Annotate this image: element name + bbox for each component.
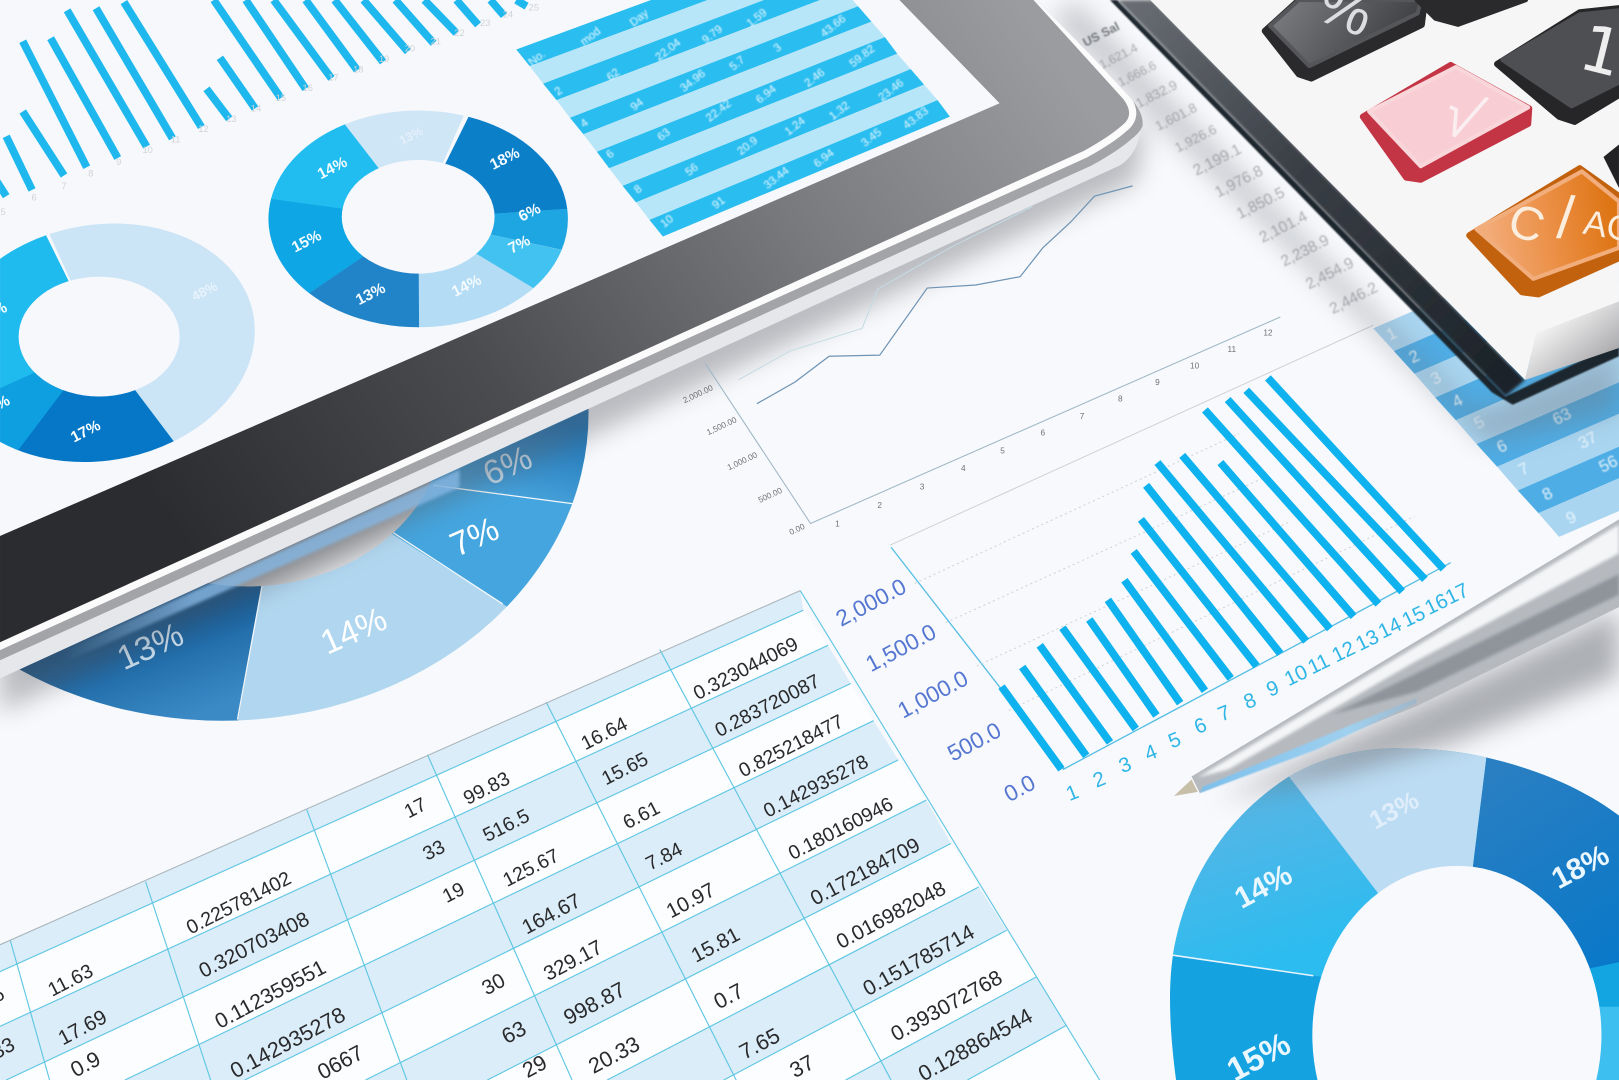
- bar chart y labels: 1,500.0: [861, 618, 940, 677]
- pen barrel: [1192, 519, 1619, 793]
- line chart: [682, 186, 1280, 537]
- table grid lines: [0, 591, 1100, 1080]
- tablet donut centre: 13%: [353, 280, 389, 309]
- grey number column: 1,601.8: [1153, 100, 1199, 134]
- tablet donut left: [0, 260, 220, 446]
- table values: 17: [401, 794, 430, 823]
- tablet table text: 20.9: [735, 135, 760, 158]
- grey number column: 2,101.4: [1257, 208, 1311, 247]
- line chart axis labels: 500.00: [757, 486, 784, 505]
- bar chart x labels: 13: [1352, 625, 1383, 656]
- data table: [0, 591, 1100, 1080]
- tablet bar chart x labels: 6: [32, 192, 37, 202]
- faint data line: [738, 207, 1033, 380]
- table values: 11.63: [44, 960, 97, 1001]
- tablet bar chart x labels: 16: [303, 83, 313, 93]
- line chart axis labels: 6: [1041, 429, 1046, 438]
- line chart axis labels: 3: [920, 482, 925, 491]
- line chart axis labels: 5: [1000, 446, 1005, 455]
- table values: [0, 633, 1037, 1080]
- grey number column: 1,666.6: [1115, 58, 1159, 89]
- tablet bar chart x labels: [1, 2, 539, 217]
- bars: [1002, 378, 1443, 769]
- tablet bar chart x labels: 22: [454, 28, 465, 38]
- key: small dark: [1603, 145, 1619, 188]
- tablet bar chart x labels: 17: [328, 73, 339, 83]
- right blue table: [1373, 194, 1619, 537]
- table shaded rows: [0, 591, 1067, 1080]
- right table numbers: [1383, 323, 1619, 528]
- large pie chart under tablet: [20, 408, 589, 721]
- table values: 30: [478, 969, 509, 1000]
- right table numbers: 63: [1549, 404, 1574, 429]
- tablet donut centre: [289, 124, 544, 309]
- key: one: [1497, 8, 1619, 122]
- right table numbers: 2: [1406, 346, 1423, 367]
- tablet table text: No.: [526, 48, 548, 69]
- bar chart x labels: 5: [1165, 728, 1184, 753]
- right table numbers: 37: [1575, 427, 1600, 453]
- table values: 7.84: [642, 838, 686, 875]
- line chart axis labels: 7: [1080, 412, 1085, 421]
- right table numbers: 4: [1449, 390, 1466, 411]
- tablet table text: 91: [710, 194, 728, 212]
- table values: 17.69: [54, 1006, 111, 1050]
- table values: 10.97: [663, 879, 719, 923]
- table values: 16.64: [578, 713, 631, 755]
- bar chart x labels: 11: [1304, 649, 1333, 679]
- tablet table text: 6: [604, 148, 617, 161]
- pen dark band: [1332, 574, 1619, 714]
- table values: 19: [439, 878, 468, 908]
- right table numbers: 6: [1493, 436, 1510, 457]
- key: C/AC: [1469, 168, 1619, 294]
- tablet table text: 1.32: [827, 100, 852, 123]
- table values: 998.87: [559, 977, 629, 1030]
- tablet table text: 43.83: [901, 105, 931, 132]
- tablet table text: 10: [659, 213, 676, 230]
- pen tip: [1174, 780, 1198, 796]
- table values: 0.7: [709, 978, 748, 1014]
- table values: 15.65: [598, 748, 652, 790]
- table values: 329.17: [540, 936, 606, 986]
- bar chart x labels: 15: [1398, 601, 1429, 632]
- table values: 0.825218477: [735, 711, 847, 782]
- table values: 0.112359551: [211, 956, 330, 1034]
- tablet table text: Day: [628, 7, 651, 29]
- grey number column: 1,621.4: [1097, 41, 1140, 72]
- tablet table text: [526, 7, 931, 230]
- tablet bar chart x labels: 20: [405, 44, 415, 54]
- donut divider: [1172, 955, 1313, 976]
- table values: 15.81: [687, 923, 744, 967]
- line chart axis labels: 12: [1263, 329, 1273, 338]
- tablet table text: 4: [578, 117, 591, 130]
- pen highlight: [1198, 525, 1619, 777]
- tablet bar chart x labels: 10: [143, 145, 153, 155]
- table values: 0.151785714: [859, 921, 979, 1001]
- calculator: [1110, 0, 1619, 405]
- line chart axis labels: 1,000.00: [726, 450, 759, 472]
- paper edge line: [890, 325, 1373, 545]
- label 13%: 13%: [1365, 786, 1424, 835]
- line chart axis labels: 2: [877, 501, 882, 510]
- bar chart x labels: 9: [1263, 676, 1282, 702]
- bar chart x labels: 3: [1115, 752, 1135, 778]
- tablet bar chart x labels: 5: [1, 207, 6, 217]
- tablet donut centre: 7%: [506, 232, 533, 257]
- tablet table text: 1.24: [783, 115, 808, 138]
- donut chart bottom right: [1170, 748, 1619, 1080]
- tablet donut centre: 15%: [289, 227, 325, 256]
- tablet table text: 6.94: [812, 147, 837, 170]
- tablet bar chart x labels: 15: [276, 93, 286, 103]
- tablet table text: 34.96: [678, 68, 708, 95]
- line chart axis labels: 1: [835, 520, 840, 529]
- line chart axis labels: 8: [1118, 395, 1123, 404]
- tablet bar chart x labels: 21: [431, 36, 441, 46]
- tablet screen: [0, 0, 999, 536]
- grey number column: 2,454.9: [1303, 254, 1357, 293]
- tablet table text: 2: [553, 85, 565, 98]
- tablet bar chart x labels: 24: [503, 10, 513, 20]
- right table numbers: 5: [1471, 412, 1488, 433]
- grey number column: 1,976.8: [1212, 163, 1266, 201]
- tablet bar chart x labels: 11: [171, 134, 180, 144]
- grid lines: [915, 434, 1415, 710]
- grey number column: 2,238.9: [1278, 232, 1332, 270]
- tablet bar chart x labels: 19: [379, 54, 389, 64]
- tablet shadow: [0, 124, 1146, 712]
- table values: 6.61: [620, 797, 664, 834]
- tablet table text: 9.79: [700, 23, 725, 46]
- key legend C/AC: C: [1502, 193, 1551, 254]
- right table numbers: 7: [1515, 458, 1532, 480]
- pen: [1174, 519, 1619, 796]
- tablet bar chart x labels: 14: [251, 104, 261, 114]
- pen shadow: [1218, 609, 1619, 800]
- tablet donut centre: 18%: [487, 144, 523, 174]
- bar chart x labels: 1: [1063, 780, 1082, 806]
- tablet table text: 8: [632, 183, 645, 196]
- tablet donut left: 48%: [189, 278, 220, 304]
- bar chart y labels: [831, 573, 1040, 807]
- tablet bar chart x labels: 12: [198, 124, 209, 134]
- tablet table text: 2.46: [802, 67, 827, 90]
- bar chart x labels: 7: [1215, 701, 1234, 726]
- table values: 0.016982048: [833, 877, 950, 954]
- bar chart: [831, 378, 1472, 807]
- tablet silver frame: [0, 0, 1156, 681]
- tablet table rows: [516, 0, 950, 236]
- pie dividers: [237, 485, 574, 720]
- tablet donut left: 17%: [68, 417, 104, 446]
- bar chart x labels: 2: [1090, 767, 1109, 793]
- line chart axis labels: 4: [961, 464, 966, 473]
- pie label 7%: 7%: [444, 510, 505, 565]
- tablet table text: 23.46: [876, 77, 906, 104]
- table values: 0.320703408: [195, 908, 313, 983]
- tablet bar chart: [0, 0, 527, 196]
- tablet table text: 6.94: [754, 83, 779, 106]
- table values: 99.83: [460, 768, 514, 810]
- bar chart y labels: 1,000.0: [893, 665, 972, 723]
- bar chart x labels: 6: [1191, 713, 1210, 739]
- table white gaps: [0, 610, 1100, 1080]
- grey number column: [1068, 19, 1381, 318]
- bar chart x labels: 10: [1281, 660, 1311, 691]
- donut hole: [1312, 866, 1601, 1080]
- tablet donut centre: 6%: [516, 200, 544, 225]
- tablet blue reflection on pie: [63, 470, 459, 663]
- calculator front face: [1525, 301, 1619, 380]
- right table numbers: 3: [1427, 368, 1444, 389]
- tablet table text: 43.66: [819, 13, 848, 40]
- table values: 20.33: [584, 1031, 644, 1079]
- pie label 13%: 13%: [112, 615, 189, 678]
- tablet table text: 62: [605, 66, 622, 84]
- table values: 0.225781402: [183, 867, 295, 939]
- tablet donut centre: 14%: [315, 154, 350, 183]
- calculator shadow: [1053, 0, 1619, 444]
- bar chart x labels: 8: [1240, 688, 1260, 714]
- grey number column: 1,850.5: [1234, 184, 1288, 223]
- table values: 0.393072768: [887, 966, 1006, 1046]
- bar chart axes: [891, 547, 1451, 769]
- grey number column: 2,199.1: [1191, 141, 1244, 179]
- line chart axis labels: 9: [1155, 378, 1160, 387]
- tablet table text: 22.04: [653, 37, 683, 64]
- bar chart y labels: 500.0: [943, 717, 1005, 766]
- line chart axis labels: 1,500.00: [705, 415, 739, 437]
- table values: 33: [419, 836, 449, 865]
- calculator top face: [1150, 0, 1619, 380]
- line chart axis labels: 2,000.00: [682, 383, 715, 405]
- table top edge: [0, 591, 800, 945]
- right table numbers: 9: [1563, 507, 1579, 528]
- table values: 0.323044069: [690, 633, 802, 705]
- table values: 164.67: [518, 889, 585, 939]
- tablet table text: 3: [772, 42, 784, 55]
- table values: 0.180160946: [785, 793, 897, 865]
- tablet donut centre: 14%: [449, 271, 485, 301]
- calculator dark side: [1110, 0, 1619, 405]
- key: square root: √: [1433, 79, 1492, 156]
- table values: 0.283720087: [712, 670, 824, 742]
- label 18%: 18%: [1546, 839, 1615, 896]
- label 14%: 14%: [1229, 858, 1298, 915]
- tablet bar chart x labels: 8: [88, 169, 93, 179]
- key: percent: [1265, 0, 1425, 78]
- tablet table text: 56: [683, 161, 701, 179]
- pen reflection: [1200, 698, 1417, 793]
- data line: [757, 186, 1133, 404]
- bar chart x labels: [1063, 579, 1472, 806]
- key legend C/AC: /: [1555, 184, 1577, 252]
- tablet table text: 59.82: [847, 43, 877, 70]
- line chart axis labels: 10: [1190, 362, 1200, 371]
- line chart axis labels: 0.00: [788, 522, 807, 537]
- table values: 7.65: [735, 1022, 784, 1064]
- bar chart x labels: 4: [1141, 740, 1161, 766]
- grey number column: in US Sal: [1068, 19, 1122, 56]
- line chart axis labels: [682, 329, 1273, 537]
- tablet bezel: [0, 0, 1129, 642]
- tablet bar chart x labels: 9: [116, 157, 121, 167]
- tablet bar chart x labels: 13: [226, 114, 236, 124]
- bar chart x labels: 17: [1442, 579, 1472, 609]
- pie centre hole: [52, 260, 444, 586]
- right table numbers: 1: [1383, 323, 1400, 344]
- tablet table text: 63: [655, 126, 673, 144]
- table values: 125.67: [499, 845, 563, 892]
- key: square root: [1363, 65, 1529, 180]
- tablet bar chart x labels: 25: [529, 2, 539, 12]
- tablet table text: 5.7: [728, 54, 747, 73]
- tablet table text: mod: [578, 25, 603, 48]
- table values: 63: [497, 1015, 530, 1049]
- bar chart x labels: 12: [1328, 636, 1359, 667]
- bar chart x labels: 16: [1421, 589, 1452, 620]
- bar chart y labels: 0.0: [999, 769, 1040, 807]
- grey number column: 2,446.2: [1327, 279, 1381, 318]
- tablet donut centre: 13%: [397, 124, 425, 148]
- line chart axis labels: 11: [1228, 345, 1236, 354]
- right table numbers: 8: [1539, 483, 1556, 504]
- grey number column: 1,832.9: [1133, 77, 1180, 111]
- tablet table text: 3.45: [859, 127, 884, 150]
- tablet bar chart x labels: 18: [353, 64, 363, 74]
- tablet: [0, 0, 1156, 681]
- key: top dark: [1417, 0, 1526, 25]
- table values: 516.5: [479, 805, 533, 847]
- tablet table text: 1.59: [745, 7, 769, 30]
- table values: 0.142935278: [760, 751, 872, 822]
- table values: 0.172184709: [807, 833, 924, 910]
- tablet bar chart x labels: 7: [61, 181, 67, 191]
- pie label 14%: 14%: [315, 600, 393, 662]
- bar chart y labels: 2,000.0: [831, 573, 910, 631]
- tablet bar chart x labels: 23: [480, 18, 490, 28]
- bar chart x labels: 14: [1375, 613, 1405, 643]
- tablet table text: 94: [629, 96, 646, 114]
- tablet table text: 22.42: [704, 98, 734, 125]
- key legend C/AC: [1502, 184, 1619, 254]
- tablet table text: 33.44: [762, 165, 792, 192]
- pie label 6%: 6%: [477, 439, 538, 493]
- grey number column: 1,926.6: [1172, 122, 1219, 155]
